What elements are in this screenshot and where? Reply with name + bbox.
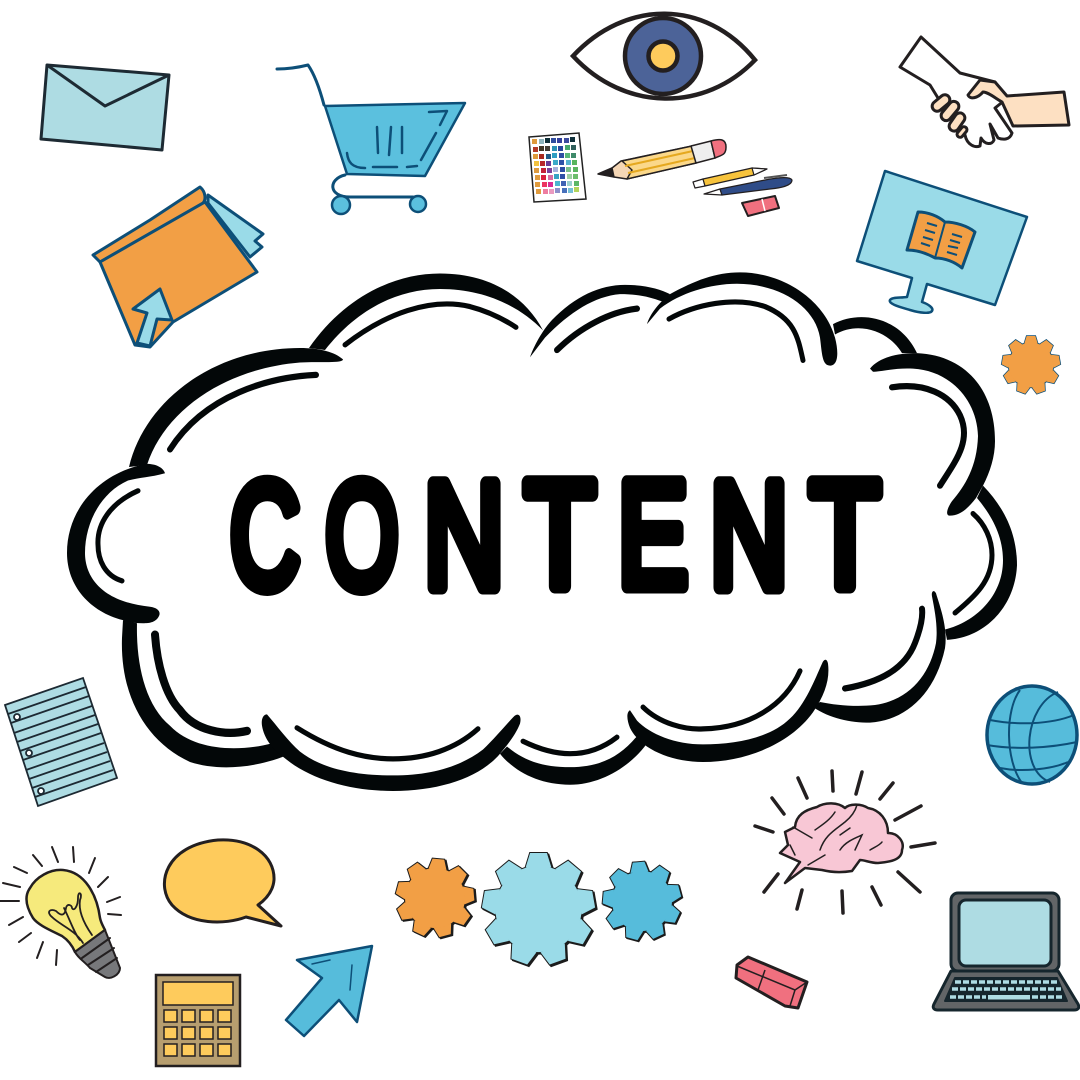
icon: globe xyxy=(987,686,1077,784)
title: CONTENT: T xyxy=(525,452,595,618)
title: CONTENT: C xyxy=(230,452,300,619)
title: CONTENT: N xyxy=(424,452,504,619)
icon: pen xyxy=(704,175,792,195)
title: CONTENT: O xyxy=(326,451,398,619)
icon: eraser xyxy=(736,957,807,1008)
cloud outline xyxy=(67,272,1017,791)
title: CONTENT: T xyxy=(810,452,880,618)
title: CONTENT xyxy=(230,451,880,619)
icon: light bulb xyxy=(0,847,121,978)
icon: blue arrow xyxy=(286,946,372,1036)
icon: light blue gear xyxy=(481,853,597,968)
icon: notepad xyxy=(5,678,117,806)
icon: large pencil xyxy=(598,140,726,179)
icon: small eraser xyxy=(742,196,779,216)
icon: speech bubble xyxy=(164,840,281,926)
icon: folder with cursor xyxy=(93,187,263,347)
icon: small pencil xyxy=(693,168,767,188)
icon: monitor with book xyxy=(857,171,1027,313)
icon: calculator xyxy=(156,975,240,1066)
icon: envelope xyxy=(41,65,169,150)
icon: handshake xyxy=(900,37,1069,147)
icon: brain with rays xyxy=(755,771,935,913)
icon: laptop xyxy=(933,893,1079,1010)
icon: colour palette card xyxy=(529,133,586,202)
icon: small orange gear xyxy=(1001,336,1061,395)
icon: eye xyxy=(573,14,755,99)
title: CONTENT: E xyxy=(618,452,688,618)
icon: shopping cart xyxy=(277,65,465,214)
title: CONTENT: N xyxy=(710,452,788,619)
icon: blue gear xyxy=(599,859,686,945)
icon: orange gear xyxy=(392,856,480,942)
